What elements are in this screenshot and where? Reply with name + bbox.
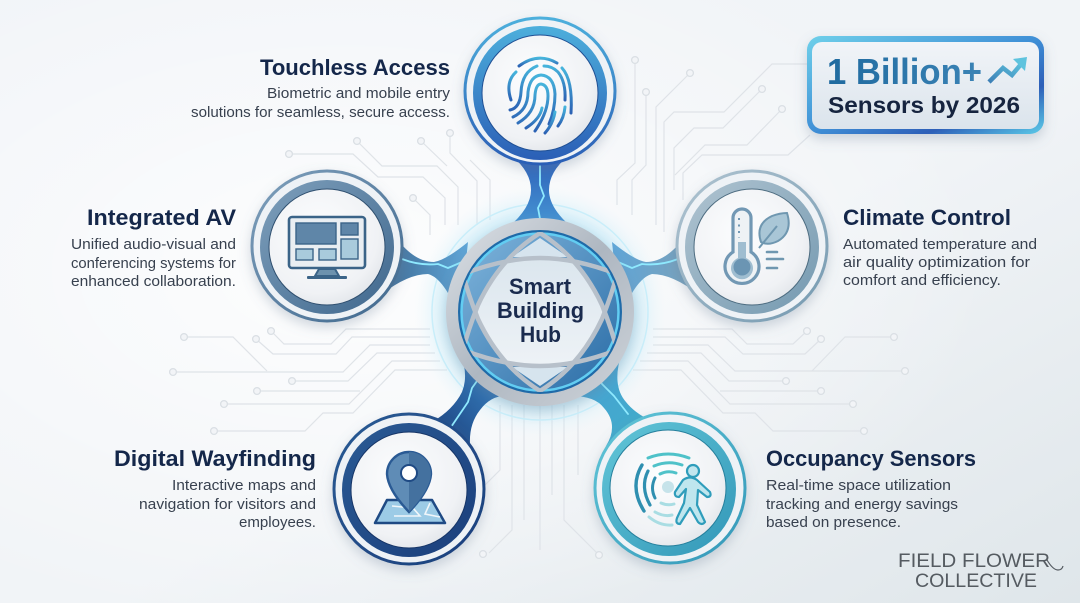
text block: integrated av: Unified audio-visual and: [71, 237, 236, 253]
text block: digital wayfinding: employees.: [239, 515, 316, 531]
text block: climate control: Automated temperature and: [843, 237, 1037, 253]
hub star emblem: [463, 233, 617, 391]
icon: rising arrow: [989, 57, 1027, 82]
text block: climate control: comfort and efficiency.: [843, 273, 1001, 289]
text block: integrated av: conferencing systems for: [71, 256, 236, 272]
connector: right: [612, 232, 698, 318]
text block: touchless access: [191, 55, 451, 121]
text block: occupancy sensors: based on presence.: [766, 515, 901, 531]
text block: touchless access: Biometric and mobile entry: [267, 86, 451, 102]
text block: digital wayfinding: navigation for visitors and: [139, 497, 316, 513]
hub label: Hub: [520, 322, 561, 347]
hub label: Building: [497, 298, 584, 323]
node: occupancy sensors: [595, 413, 745, 563]
text block: integrated av: enhanced collaboration.: [71, 274, 236, 290]
hub label: [497, 274, 584, 347]
callout subline: Sensors by 2026: [828, 92, 1020, 118]
text block: climate control: [843, 205, 1037, 289]
watermark: field flower collective: [898, 550, 1063, 592]
energy bolts: [402, 166, 678, 430]
text block: digital wayfinding: [114, 446, 316, 531]
callout: 1 billion sensors: [807, 36, 1044, 134]
watermark: field flower collective: COLLECTIVE: [915, 570, 1037, 592]
text block: touchless access: Touchless Access: [260, 55, 450, 80]
icon: monitor: [289, 217, 365, 279]
hub glow: [414, 186, 666, 438]
connector: bottom left: [432, 352, 510, 444]
text block: touchless access: solutions for seamless, secure access.: [191, 105, 450, 121]
callout headline: 1 Billion+: [827, 51, 982, 92]
node: climate control: [677, 171, 827, 321]
text block: occupancy sensors: Occupancy Sensors: [766, 446, 976, 471]
text block: climate control: air quality optimization for: [843, 255, 1030, 271]
text block: occupancy sensors: [766, 446, 976, 531]
icon: motion sensing person: [636, 454, 711, 525]
text block: digital wayfinding: Digital Wayfinding: [114, 446, 316, 471]
icon: map pin: [375, 452, 445, 523]
text block: integrated av: [71, 205, 236, 290]
node: integrated av: [252, 171, 402, 321]
watermark: field flower collective: FIELD FLOWER: [898, 550, 1050, 572]
icon: fingerprint: [509, 58, 571, 133]
connector: top: [497, 156, 583, 236]
text block: occupancy sensors: Real-time space utilization: [766, 478, 951, 494]
hub outer silver ring: [446, 218, 634, 406]
text block: climate control: Climate Control: [843, 205, 1011, 230]
icon: thermometer and leaf: [725, 209, 789, 283]
connector: left: [382, 232, 468, 318]
text block: occupancy sensors: tracking and energy savings: [766, 497, 958, 513]
node: digital wayfinding: [334, 414, 484, 564]
connector: bottom right: [572, 352, 660, 446]
hub label: Smart: [509, 274, 572, 299]
text block: digital wayfinding: Interactive maps and: [172, 478, 316, 494]
central hub: [446, 218, 634, 406]
text block: integrated av: Integrated AV: [87, 205, 236, 230]
connectors from hub to nodes: [382, 156, 698, 446]
circuit line pattern: [170, 57, 908, 558]
node: touchless access: [465, 18, 615, 164]
